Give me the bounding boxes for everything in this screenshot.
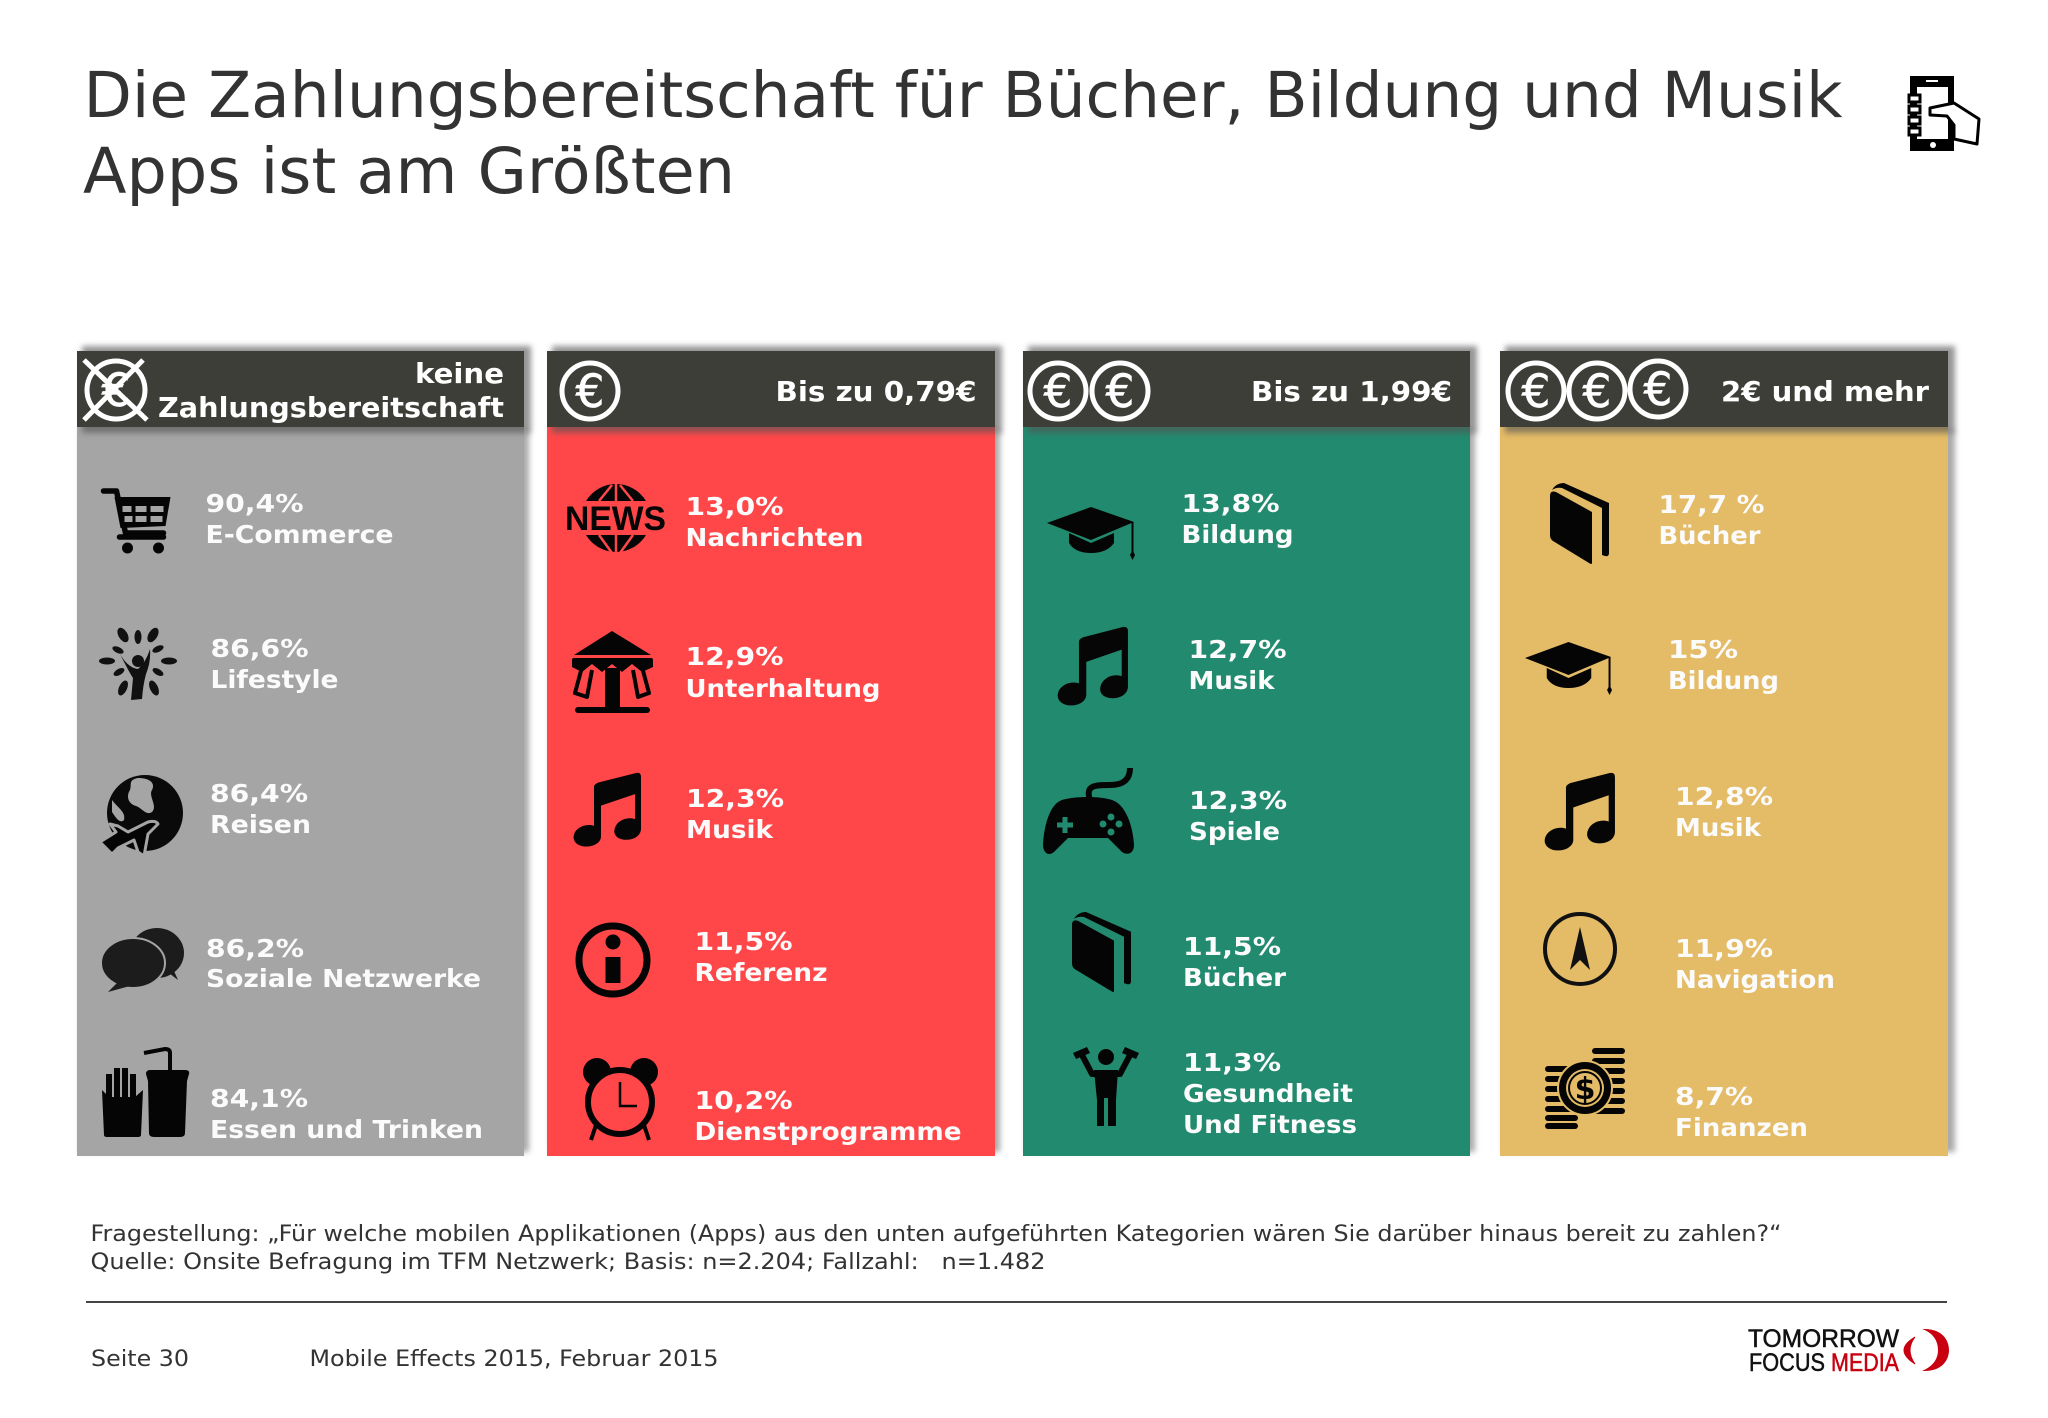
icon: euro coin: € [576, 365, 604, 418]
stat: Bildung [1668, 635, 1779, 695]
stat: Bildung [1182, 489, 1294, 549]
icon: euro coin [562, 363, 618, 419]
stat: Bildung: 15% [1668, 635, 1738, 664]
icon: three euro coins [1508, 361, 1686, 419]
text block: question and source [90, 1222, 1782, 1275]
stat: Bildung: Bildung [1182, 520, 1294, 549]
icon: two euro coins: € [1044, 365, 1072, 418]
icon: speech bubbles [101, 928, 184, 992]
panel: keine Zahlungsbereitschaft [77, 346, 531, 1156]
icon: fitness figure [1073, 1047, 1139, 1126]
stat: E-Commerce: 90,4% [206, 489, 304, 518]
icon: three euro coins: € [1644, 363, 1672, 416]
icon: book [1550, 483, 1609, 564]
icon: compass [1545, 914, 1615, 984]
stat: Musik [1675, 782, 1773, 842]
stat: Reisen: Reisen [210, 810, 311, 839]
title: Apps ist am Größten [83, 135, 735, 208]
stat: Referenz: 11,5% [694, 927, 792, 956]
title [83, 59, 1843, 208]
stat: Bildung: Bildung [1668, 666, 1779, 695]
icon: crossed-out euro: € [102, 364, 130, 417]
icon: three euro coins: € [1522, 365, 1550, 418]
stat: Soziale Netzwerke: 86,2% [206, 934, 304, 963]
stat: Referenz: Referenz [694, 958, 828, 987]
heading: Bis zu 1,99€: Bis zu 1,99€ [1251, 375, 1452, 408]
text block: question and source: Quelle: Onsite Befragung im TFM Netzwerk; Basis: n=2.204; Fallzahl: n=1.482 [90, 1250, 1046, 1275]
icon: game controller [1043, 768, 1134, 854]
stat: Bücher: 17,7 % [1658, 490, 1764, 519]
stat: Soziale Netzwerke: Soziale Netzwerke [206, 964, 481, 993]
stat: Musik [686, 784, 784, 844]
icon: two euro coins [1030, 363, 1148, 419]
stat: Spiele: Spiele [1189, 817, 1280, 846]
icon: crossed-out euro [84, 360, 147, 420]
stat: Unterhaltung: Unterhaltung [686, 674, 880, 703]
icon: shopping cart [104, 491, 170, 554]
heading: 2€ und mehr: 2€ und mehr [1721, 375, 1929, 408]
stat: Gesundheit und Fitness: 11,3% [1183, 1048, 1281, 1077]
icon: music note [574, 773, 641, 847]
heading: keine Zahlungsbereitschaft: Zahlungsbereitschaft [158, 391, 504, 424]
stat: Navigation [1675, 934, 1835, 994]
icon: alarm clock [583, 1058, 658, 1140]
stat: Essen und Trinken: 84,1% [210, 1084, 308, 1113]
icon: graduation cap [1525, 642, 1612, 695]
stat: Spiele [1189, 786, 1287, 846]
stat: Bücher [1183, 932, 1287, 992]
logo: Tomorrow Focus Media: MEDIA [1831, 1349, 1899, 1377]
icon: news globe: NEWS [565, 500, 666, 538]
title: Die Zahlungsbereitschaft für Bücher, Bildung und Musik [84, 59, 1843, 132]
icon: music note [1058, 627, 1128, 705]
icon: book [1072, 912, 1131, 992]
icon: graduation cap [1047, 507, 1135, 560]
stat: Essen und Trinken: Essen und Trinken [210, 1115, 483, 1144]
icon: carousel [572, 631, 653, 713]
logo: Tomorrow Focus Media [1748, 1325, 1949, 1377]
icon: two euro coins: € [1106, 365, 1134, 418]
stat: E-Commerce [206, 489, 394, 549]
stat: Referenz [694, 927, 828, 987]
panel: 2€ und mehr [1500, 346, 1955, 1156]
icon: three euro coins: € [1583, 365, 1611, 418]
icon: coins with dollar: $ [1575, 1072, 1595, 1107]
heading: Bis zu 0,79€: Bis zu 0,79€ [776, 375, 976, 408]
icon: hand holding smartphone [1909, 76, 1979, 151]
logo: Tomorrow Focus Media: TOMORROW [1748, 1325, 1899, 1353]
stat: Finanzen: Finanzen [1675, 1113, 1808, 1142]
stat: Navigation: 11,9% [1675, 934, 1773, 963]
icon: lifestyle tree person [99, 626, 177, 700]
footer: source title: Mobile Effects 2015, Februar 2015 [310, 1347, 718, 1372]
stat: Musik: 12,7% [1188, 635, 1286, 664]
stat: Reisen [210, 779, 311, 839]
stat: Essen und Trinken [210, 1084, 483, 1144]
stat: Lifestyle [210, 634, 338, 694]
stat: Bücher: Bücher [1183, 963, 1287, 992]
icon: globe with plane [100, 775, 183, 856]
icon: news globe [565, 484, 666, 553]
stat: Finanzen [1675, 1082, 1808, 1142]
icon: coins with dollar [1545, 1048, 1625, 1129]
stat: Nachrichten: Nachrichten [686, 523, 864, 552]
stat: Bücher [1658, 490, 1764, 550]
footer: page number: Seite 30 [91, 1347, 189, 1372]
stat: Musik: Musik [686, 815, 774, 844]
stat: Dienstprogramme: 10,2% [694, 1086, 792, 1115]
stat: Musik [1188, 635, 1286, 695]
stat: Unterhaltung: 12,9% [686, 642, 784, 671]
icon: fries and drink [102, 1049, 189, 1137]
stat: Lifestyle: Lifestyle [210, 665, 338, 694]
stat: Gesundheit und Fitness [1183, 1048, 1357, 1139]
stat: Nachrichten: 13,0% [686, 492, 784, 521]
stat: Nachrichten [686, 492, 864, 552]
stat: Bücher: Bücher [1658, 521, 1761, 550]
panel: Bis zu 1,99€ [1023, 346, 1477, 1156]
stat: Reisen: 86,4% [210, 779, 308, 808]
icon: info [579, 926, 647, 994]
stat: Bücher: 11,5% [1183, 932, 1281, 961]
logo: Tomorrow Focus Media: FOCUS [1749, 1349, 1825, 1377]
panel: Bis zu 0,79€ [547, 346, 1002, 1156]
stat: Soziale Netzwerke [206, 934, 481, 993]
icon: music note [1545, 773, 1615, 850]
stat: Musik: Musik [1675, 813, 1762, 842]
stat: E-Commerce: E-Commerce [206, 520, 394, 549]
stat: Bildung: 13,8% [1182, 489, 1280, 518]
stat: Musik: Musik [1188, 666, 1276, 695]
stat: Spiele: 12,3% [1189, 786, 1287, 815]
stat: Musik: 12,8% [1675, 782, 1773, 811]
stat: Gesundheit und Fitness: Gesundheit [1183, 1079, 1353, 1108]
stat: Unterhaltung [686, 642, 880, 703]
heading: keine Zahlungsbereitschaft: keine [415, 357, 504, 390]
stat: Lifestyle: 86,6% [210, 634, 308, 663]
stat: Dienstprogramme: Dienstprogramme [694, 1117, 962, 1146]
heading: keine Zahlungsbereitschaft [158, 357, 504, 424]
stat: Musik: 12,3% [686, 784, 784, 813]
stat: Finanzen: 8,7% [1675, 1082, 1753, 1111]
text block: question and source: Fragestellung: „Für welche mobilen Applikationen (Apps) aus den unten aufgeführten Kategorien wären Sie darüber hinaus bereit zu zahlen?“ [90, 1222, 1782, 1247]
stat: Navigation: Navigation [1675, 965, 1835, 994]
stat: Gesundheit und Fitness: Und Fitness [1183, 1110, 1357, 1139]
stat: Dienstprogramme [694, 1086, 962, 1146]
